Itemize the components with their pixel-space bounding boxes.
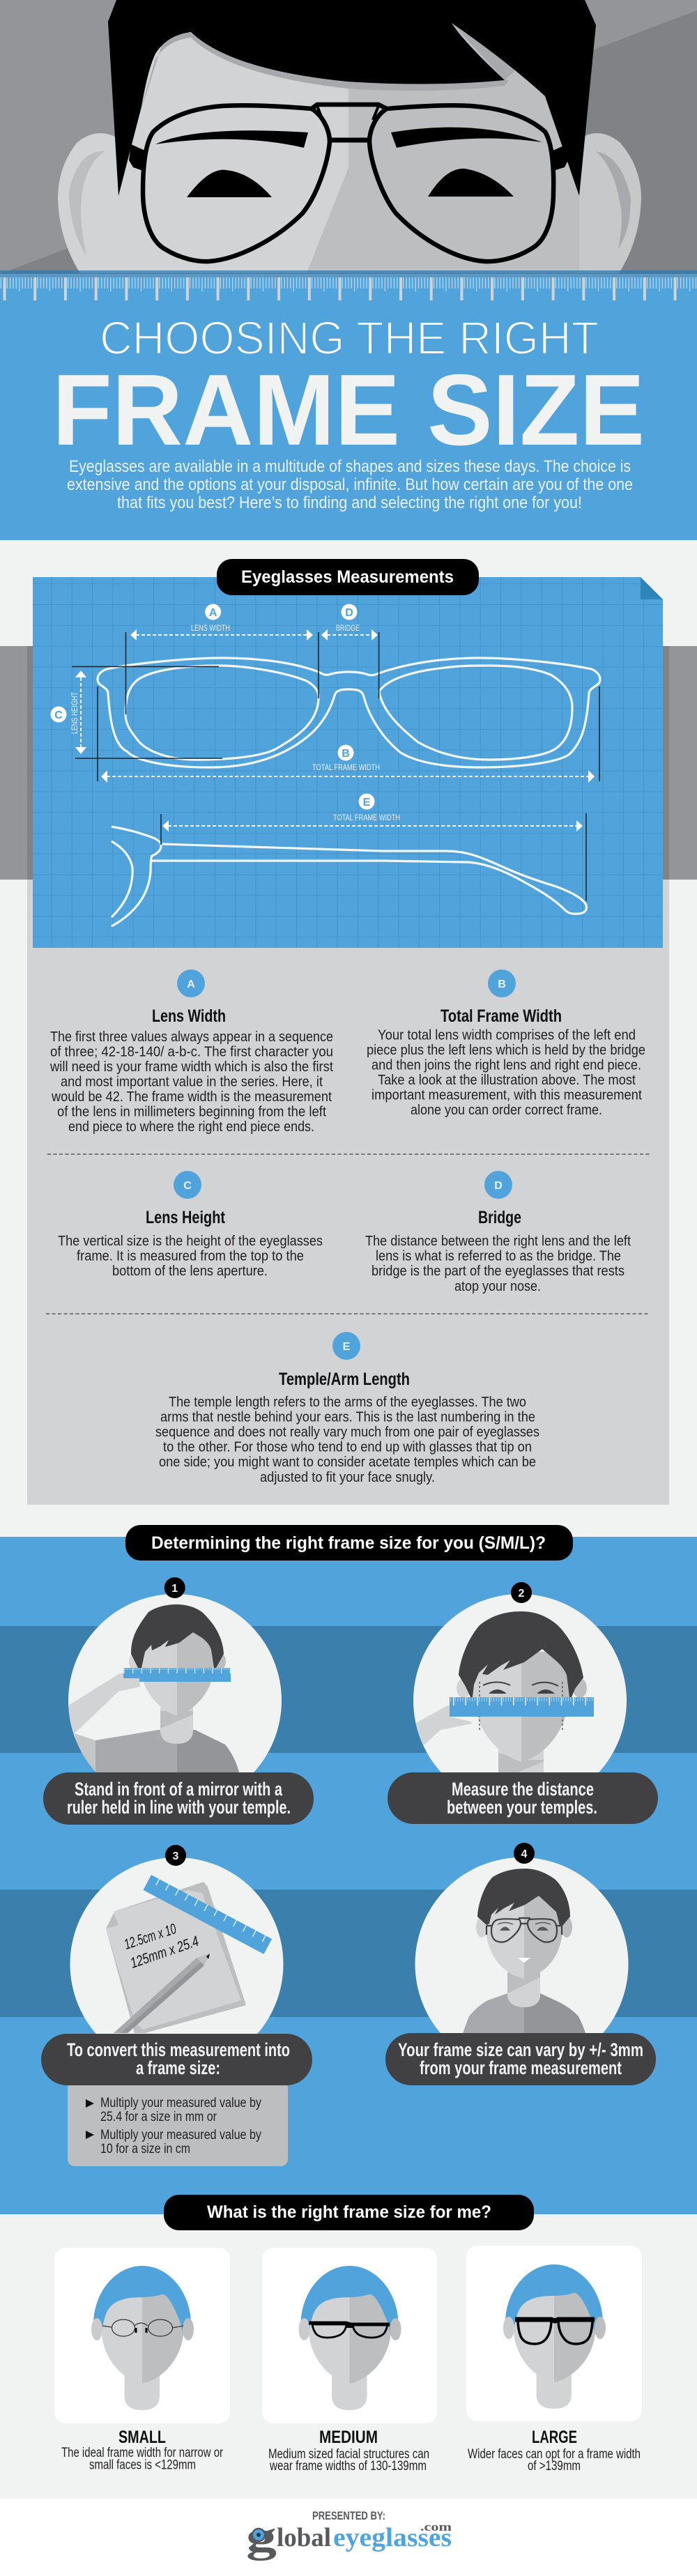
panel: blueprint diagram: E — [363, 797, 371, 808]
number 2: 2 — [519, 1588, 525, 1600]
panel: measurement details background — [27, 646, 669, 1505]
letter markers — [50, 604, 375, 810]
icon: right ear — [579, 133, 641, 273]
icon: aviator glasses — [129, 105, 568, 261]
face — [141, 1624, 177, 1716]
text block: C lens height — [58, 1171, 323, 1279]
hair — [477, 1869, 570, 1926]
card: small: small faces is <129mm — [89, 2458, 196, 2473]
handwriting: 12.5cm x 10 — [122, 1921, 178, 1953]
caption pill step 3 — [41, 2034, 312, 2085]
text block: A lens width: of the lens in millimeters beginning from the left — [57, 1104, 326, 1119]
number 1: 1 — [171, 1583, 178, 1595]
step 3 illustration: paper, ruler and pencil — [70, 1858, 283, 2034]
text block: B total frame width — [367, 969, 645, 1118]
conversion list box — [68, 2080, 288, 2166]
arm — [415, 1705, 473, 1745]
text block: D bridge: The distance between the right lens and the left — [365, 1234, 631, 1249]
caption pill step 4 — [385, 2033, 656, 2085]
title: frame size: FRAME SIZE — [52, 353, 645, 466]
number 3 — [165, 1845, 186, 1866]
ears — [457, 1678, 470, 1698]
dimension labels: LENS WIDTH — [191, 623, 230, 633]
glasses — [487, 1918, 562, 1942]
text block: E temple arm length: arms that nestle behind your ears. This is the last numbering in the — [160, 1409, 535, 1425]
panel: steps background — [0, 1537, 697, 2214]
caption pill step 3: a frame size: — [136, 2057, 220, 2078]
text block: A lens width: of three; 42-18-140/ a-b-c. The first character you — [50, 1044, 333, 1059]
text block: A lens width: A — [187, 979, 195, 990]
icon: large black glasses — [515, 2320, 595, 2344]
ruler — [450, 1697, 594, 1717]
header illustration: man's face with aviator glasses — [0, 0, 697, 274]
number 1 — [164, 1577, 185, 1598]
icon: thin glasses — [102, 2320, 183, 2336]
text block: E temple arm length: Temple/Arm Length — [279, 1370, 410, 1389]
text block: E temple arm length — [155, 1332, 539, 1485]
temple dashes — [480, 1682, 562, 1731]
dimension labels: LENS HEIGHT — [70, 691, 79, 734]
text block: D bridge: atop your nose. — [454, 1279, 541, 1294]
neck — [160, 1708, 193, 1744]
face — [473, 1652, 521, 1762]
text block: C lens height: bottom of the lens aperture. — [112, 1264, 268, 1279]
caption pill step 3: To convert this measurement into — [67, 2039, 290, 2060]
dimension labels: TOTAL FRAME WIDTH — [312, 762, 380, 772]
dimension labels: BRIDGE — [336, 623, 360, 633]
icon: eyebrows and eyes — [155, 128, 542, 197]
step 2 illustration: person measuring temples — [413, 1595, 627, 1772]
caption pill step 1 — [43, 1772, 314, 1825]
conversion list box: 25.4 for a size in mm or — [100, 2110, 217, 2124]
heading pill: determining the right frame size — [125, 1525, 573, 1561]
panel: blueprint diagram — [33, 577, 663, 948]
dimension labels — [70, 623, 400, 822]
text block: D bridge: lens is what is referred to as the bridge. The — [376, 1249, 621, 1264]
footer — [0, 2499, 697, 2576]
icon: left ear — [58, 133, 120, 273]
card: medium: MEDIUM — [319, 2428, 378, 2447]
logo: globaleyeglasses.com — [246, 2513, 452, 2561]
text block: D bridge: bridge is the part of the eyeglasses that rests — [372, 1264, 625, 1279]
card: medium: Medium sized facial structures can — [268, 2447, 429, 2462]
card: small: The ideal frame width for narrow or — [61, 2446, 224, 2460]
brows and eyes — [483, 1682, 558, 1694]
shirt — [463, 1993, 524, 2033]
caption pill step 2: between your temples. — [447, 1797, 597, 1818]
text block: A lens width: would be 42. The frame width is the measurement — [51, 1089, 332, 1105]
logo: globaleyeglasses.com: lobal — [277, 2523, 331, 2552]
text block: B total frame width: important measurement, with this measurement — [372, 1087, 642, 1103]
ears — [129, 1653, 140, 1670]
caption pill step 1: Stand in front of a mirror with a — [75, 1779, 283, 1800]
heading pill: determining the right frame size: Determining the right frame size for you (S/M/L)? — [151, 1533, 546, 1553]
panel: blueprint diagram: B — [342, 748, 350, 760]
caption pill step 2 — [388, 1772, 658, 1824]
number 2 — [511, 1582, 532, 1603]
conversion list box: Multiply your measured value by — [100, 2128, 261, 2142]
caption pill step 4: from your frame measurement — [420, 2057, 622, 2078]
face — [118, 21, 579, 273]
conversion list box: Multiply your measured value by — [100, 2096, 261, 2110]
ears — [476, 1917, 487, 1938]
text block: E temple arm length: one side; you might want to consider acetate temples which can be — [159, 1455, 536, 1470]
side view glasses outline — [112, 827, 586, 926]
icon: medium black glasses — [309, 2323, 390, 2338]
hair — [459, 1611, 583, 1697]
caption pill step 2: Measure the distance — [452, 1779, 594, 1800]
text block: A lens width: end piece to where the right end piece ends. — [68, 1119, 314, 1135]
panel: blueprint diagram: D — [345, 607, 353, 619]
text block: B total frame width: Take a look at the illustration above. The most — [378, 1073, 636, 1088]
section background — [0, 540, 697, 1537]
text block: D bridge — [365, 1171, 631, 1294]
panel: frame size section background — [0, 2214, 697, 2499]
intro paragraph: that fits you best? Here’s to finding and selecting the right one for you! — [117, 493, 582, 512]
card: large — [466, 2246, 642, 2474]
card: large: LARGE — [532, 2428, 577, 2447]
card: medium — [262, 2248, 437, 2474]
panel: blueprint diagram: C — [54, 710, 63, 721]
logo: globaleyeglasses.com: eyeglasses — [333, 2523, 452, 2552]
intro paragraph: Eyeglasses are available in a multitude of shapes and sizes these days. The choice is — [69, 457, 631, 476]
text block: A lens width: will need is your frame width which is also the first — [49, 1059, 333, 1075]
arm — [68, 1673, 140, 1734]
dimension labels: TOTAL FRAME WIDTH — [333, 813, 400, 822]
card: medium: wear frame widths of 130-139mm — [269, 2459, 427, 2474]
hair — [131, 1604, 224, 1668]
logo: globaleyeglasses.com: g — [246, 2513, 277, 2561]
dashed arrows — [81, 635, 589, 826]
logo: globaleyeglasses.com: .com — [420, 2520, 452, 2533]
shirt — [75, 1733, 95, 1772]
panel: blueprint diagram: A — [209, 607, 217, 619]
text block: B total frame width: alone you can order correct frame. — [411, 1103, 602, 1118]
text block: E temple arm length: E — [343, 1341, 351, 1353]
text block: A lens width: and most important value in the series. Here, it — [61, 1075, 323, 1090]
number 4: 4 — [521, 1848, 528, 1860]
text block: C lens height: C — [183, 1180, 192, 1192]
handwriting — [122, 1921, 201, 1972]
text block: B total frame width: and then joins the right lens and right end piece. — [372, 1058, 641, 1073]
title: choosing the right: CHOOSING THE RIGHT — [100, 312, 599, 365]
hair — [108, 0, 596, 196]
card: large: of >139mm — [528, 2459, 581, 2474]
text block: C lens height: frame. It is measured from the top to the — [77, 1249, 304, 1264]
text block: C lens height: The vertical size is the height of the eyeglasses — [58, 1234, 323, 1249]
ruler ticks — [0, 277, 697, 301]
card: large: Wider faces can opt for a frame width — [468, 2447, 641, 2462]
neck — [507, 1969, 540, 2007]
number 4 — [514, 1843, 535, 1864]
text block: E temple arm length: to the other. For those who tend to end up with glasses that tip on — [163, 1440, 532, 1455]
title banner with ruler edge — [0, 270, 697, 540]
text block: A lens width — [49, 969, 333, 1135]
text block: E temple arm length: adjusted to fit your face snugly. — [260, 1470, 435, 1485]
handwriting: 125mm x 25.4 — [128, 1933, 201, 1972]
text block: A lens width: The first three values always appear in a sequence — [50, 1029, 333, 1045]
text block: B total frame width: Total Frame Width — [441, 1006, 562, 1026]
ruler — [123, 1668, 231, 1682]
front view glasses outline — [98, 658, 600, 767]
mouth — [518, 1958, 530, 1963]
step 1 illustration: person holding ruler at temple — [68, 1595, 282, 1772]
measurement guide lines — [72, 632, 599, 901]
text block: C lens height: Lens Height — [146, 1208, 226, 1227]
heading pill: what is the right frame size: What is the right frame size for me? — [207, 2202, 491, 2222]
heading pill: eyeglasses measurements: Eyeglasses Measurements — [241, 567, 454, 587]
text block: B total frame width: B — [498, 979, 506, 990]
number 3: 3 — [173, 1850, 179, 1862]
intro paragraph: extensive and the options at your disposal, infinite. But how certain are you of the one — [67, 475, 633, 494]
text block: D bridge: Bridge — [478, 1208, 521, 1227]
conversion list box: 10 for a size in cm — [100, 2142, 190, 2156]
text block: E temple arm length: sequence and does not really vary much from one pair of eyeglasses — [155, 1425, 539, 1440]
text block: E temple arm length: The temple length refers to the arms of the eyeglasses. The two — [169, 1395, 526, 1410]
ruler — [143, 1875, 272, 1954]
caption pill step 1: ruler held in line with your temple. — [67, 1797, 291, 1818]
text block: A lens width: Lens Width — [152, 1006, 226, 1026]
text block: B total frame width: Your total lens width comprises of the left end — [378, 1027, 636, 1043]
pencil — [114, 1958, 204, 2033]
intro paragraph — [67, 457, 633, 512]
neck — [498, 1749, 544, 1774]
heading pill: eyeglasses measurements — [217, 559, 479, 595]
brows and eyes — [500, 1926, 549, 1931]
text block: B total frame width: piece plus the left lens which is held by the bridge — [367, 1043, 645, 1058]
card: small: SMALL — [118, 2428, 166, 2447]
heading pill: what is the right frame size — [164, 2195, 534, 2230]
card: small — [54, 2248, 230, 2473]
text block: D bridge: D — [494, 1180, 503, 1192]
paper — [106, 1882, 246, 2033]
presented by label: PRESENTED BY: — [312, 2509, 385, 2522]
face — [486, 1885, 524, 1979]
step 4 illustration: person wearing glasses — [415, 1857, 629, 2071]
